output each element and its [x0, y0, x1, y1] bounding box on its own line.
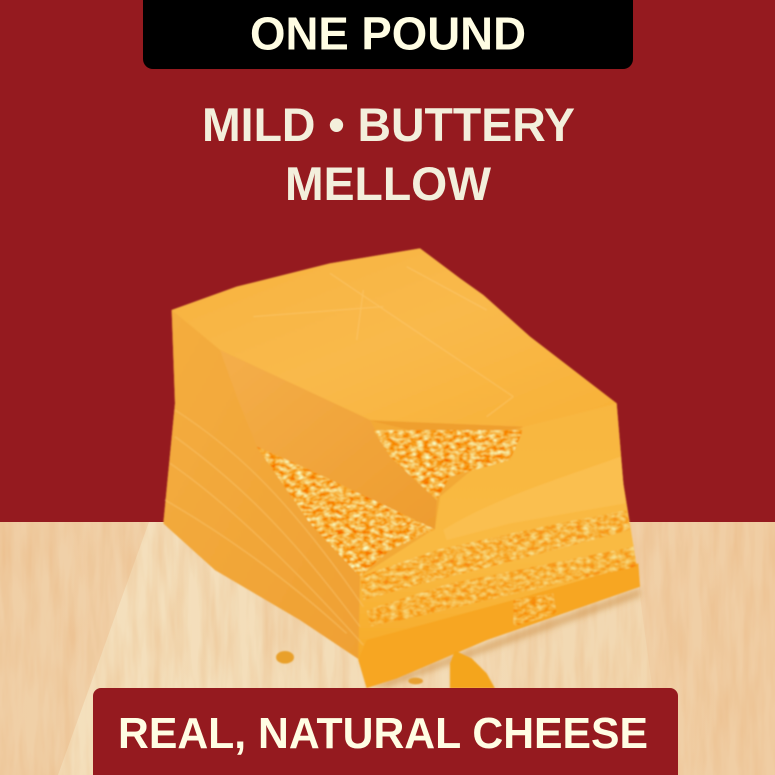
bottom banner: REAL, NATURAL CHEESE	[93, 688, 678, 775]
cheese top face	[172, 248, 617, 427]
cheese crumb left	[276, 651, 294, 664]
top badge: ONE POUND	[143, 0, 633, 69]
cheese light band on front	[443, 457, 625, 540]
cheese bottom bright band	[358, 563, 640, 688]
cheese front face	[358, 403, 640, 688]
cheese crumbled area: centre	[257, 447, 435, 577]
bottom banner: REAL, NATURAL CHEESE: REAL, NATURAL CHEESE	[118, 709, 648, 758]
cheese left face	[163, 310, 368, 687]
heading: flavor line 2: MELLOW	[285, 157, 492, 210]
cheese crumbled strip: middle	[360, 510, 630, 600]
icon: cheese wedge	[163, 248, 640, 688]
cheese crumbled patch	[513, 593, 557, 627]
cheese light slab edge	[370, 421, 523, 437]
cheese chunk	[450, 651, 495, 688]
top badge: ONE POUND: ONE POUND	[250, 8, 526, 60]
cheese top score lines	[253, 267, 513, 417]
cheese crumbled area: upper	[373, 430, 523, 500]
cheese silhouette base	[163, 248, 640, 688]
cheese crumbled strip: lower	[367, 547, 637, 627]
cheese shadow	[367, 588, 640, 688]
heading: flavor line 1: MILD • BUTTERY	[202, 98, 575, 151]
cheese upper slab	[220, 350, 437, 529]
cheese layer lines on left face	[165, 410, 363, 645]
wooden cutting board	[0, 522, 775, 775]
cheese crumb small	[408, 678, 423, 684]
